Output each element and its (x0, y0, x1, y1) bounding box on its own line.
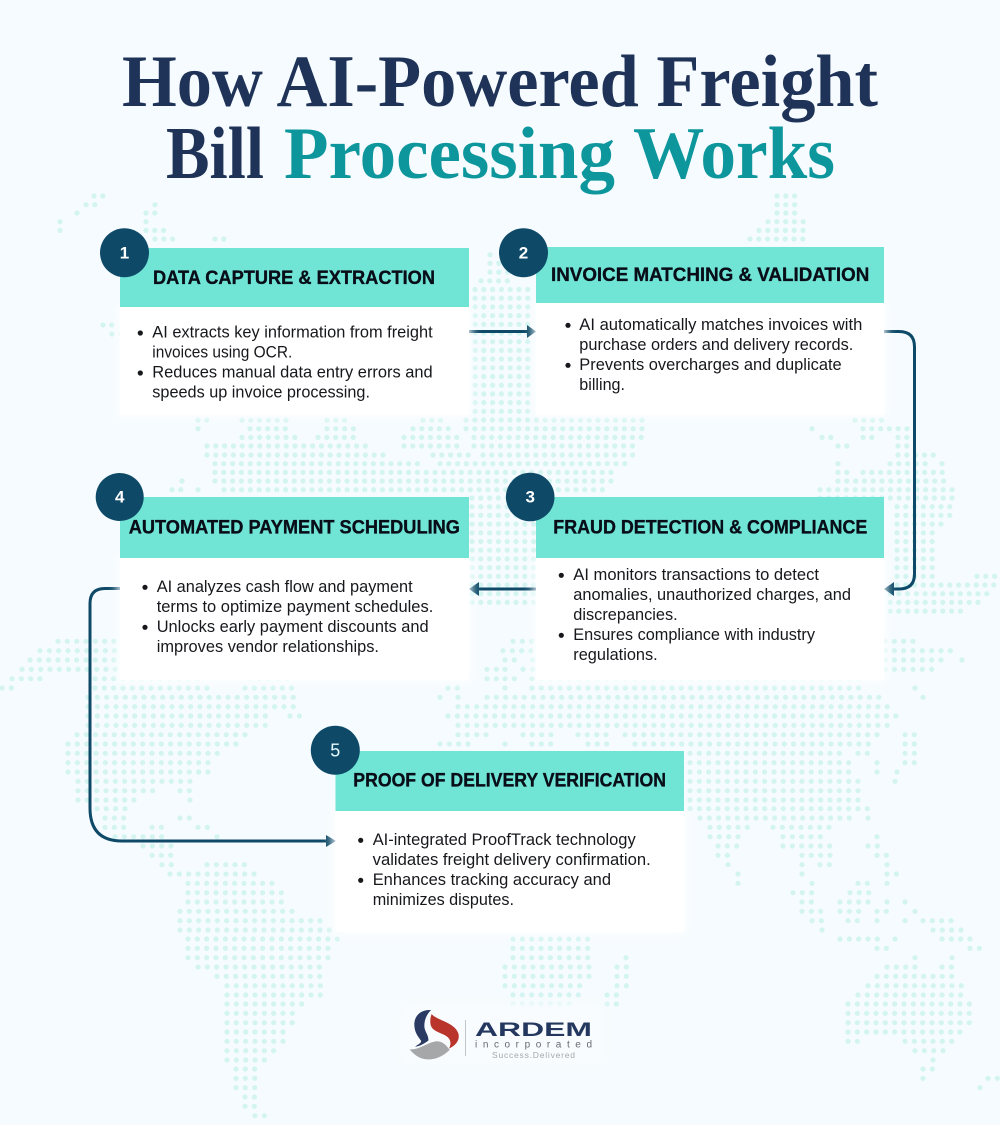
title line 1: How AI-Powered Freight (122, 41, 878, 123)
step 1 heading: DATA CAPTURE & EXTRACTION (153, 267, 435, 289)
title line 2: Bill: Bill (166, 113, 264, 195)
step 2 bullets (565, 316, 862, 394)
step 1 header (120, 248, 469, 307)
step 2 bullets: purchase orders and delivery records. (579, 336, 853, 354)
step 3 number badge (506, 473, 554, 521)
logo tagline: Success.Delivered (492, 1050, 575, 1060)
step 4 header (120, 497, 469, 558)
step 5 bullets: Enhances tracking accuracy and (373, 871, 611, 889)
step 1 number badge (100, 228, 149, 277)
step 4 number badge: 4 (115, 488, 125, 506)
step 4 bullets: AI analyzes cash flow and payment (157, 578, 413, 596)
step 3 bullets: regulations. (573, 646, 658, 664)
title line 2: Processing: Processing (284, 113, 615, 195)
logo divider (465, 1020, 466, 1056)
arrow: step 4 to step 5 (90, 588, 336, 847)
step 2 number badge (499, 228, 548, 277)
step 2 number badge: 2 (519, 244, 528, 262)
step 1 number badge: 1 (120, 244, 129, 262)
step 5 bullets: validates freight delivery confirmation. (373, 851, 651, 869)
step 1 bullets: Reduces manual data entry errors and (152, 364, 433, 382)
step 1 bullets (138, 324, 433, 402)
arrow: step 3 to step 4 (469, 582, 536, 596)
panel: step 2 invoice matching (499, 228, 886, 417)
step 5 heading: PROOF OF DELIVERY VERIFICATION (353, 770, 666, 792)
step 4 heading: AUTOMATED PAYMENT SCHEDULING (129, 516, 460, 538)
icon: logo mark (410, 1010, 459, 1059)
step 3 bullets: AI monitors transactions to detect (573, 566, 819, 584)
logo wordmark: ARDEM (475, 1020, 592, 1041)
step 3 bullets: discrepancies. (573, 606, 678, 624)
step 2 header (536, 247, 884, 303)
step 5 number badge: 5 (330, 740, 340, 760)
arrow: step 2 to step 3 (884, 332, 914, 596)
logo backing glow (400, 1002, 605, 1066)
panel: step 1 data capture (100, 228, 471, 417)
title line 2: Works: Works (633, 113, 835, 195)
step 2 heading: INVOICE MATCHING & VALIDATION (551, 264, 869, 286)
step 3 number badge: 3 (525, 488, 535, 506)
panel: step 3 fraud detection (506, 473, 886, 682)
step 1 bullets: AI extracts key information from freight (152, 324, 433, 342)
step 4 bullets: improves vendor relationships. (157, 638, 379, 656)
step 3 bullets (559, 566, 851, 664)
title (122, 41, 878, 195)
step 5 bullets: AI-integrated ProofTrack technology (373, 831, 636, 849)
step 3 heading: FRAUD DETECTION & COMPLIANCE (553, 516, 867, 538)
step 5 header (336, 751, 684, 811)
step 1 bullets: speeds up invoice processing. (152, 384, 370, 402)
step 4 bullets: Unlocks early payment discounts and (157, 618, 429, 636)
panel: step 5 proof of delivery (311, 726, 686, 934)
step 1 bullets: invoices using OCR. (152, 344, 292, 362)
step 5 number badge (311, 726, 360, 775)
step 4 bullets: terms to optimize payment schedules. (157, 598, 433, 616)
step 2 bullets: Prevents overcharges and duplicate (579, 356, 842, 374)
step 3 bullets: Ensures compliance with industry (573, 626, 816, 644)
step 2 bullets: billing. (579, 376, 625, 394)
map: upper dots (northern regions) (60, 196, 998, 611)
logo: ARDEM Incorporated (400, 1002, 605, 1066)
arrow: step 1 to step 2 (469, 325, 536, 338)
step 5 bullets (358, 831, 651, 909)
step 5 bullets: minimizes disputes. (373, 891, 514, 909)
step 4 number badge (96, 473, 144, 521)
step 2 bullets: AI automatically matches invoices with (579, 316, 862, 334)
panel: step 4 payment scheduling (96, 473, 471, 682)
step 3 header (536, 497, 884, 558)
logo subtitle: incorporated (475, 1040, 592, 1050)
map: lower dots (Americas, Africa, Asia, Oceania) (2, 641, 999, 1116)
step 4 bullets (142, 578, 433, 656)
step 3 bullets: anomalies, unauthorized charges, and (573, 586, 851, 604)
